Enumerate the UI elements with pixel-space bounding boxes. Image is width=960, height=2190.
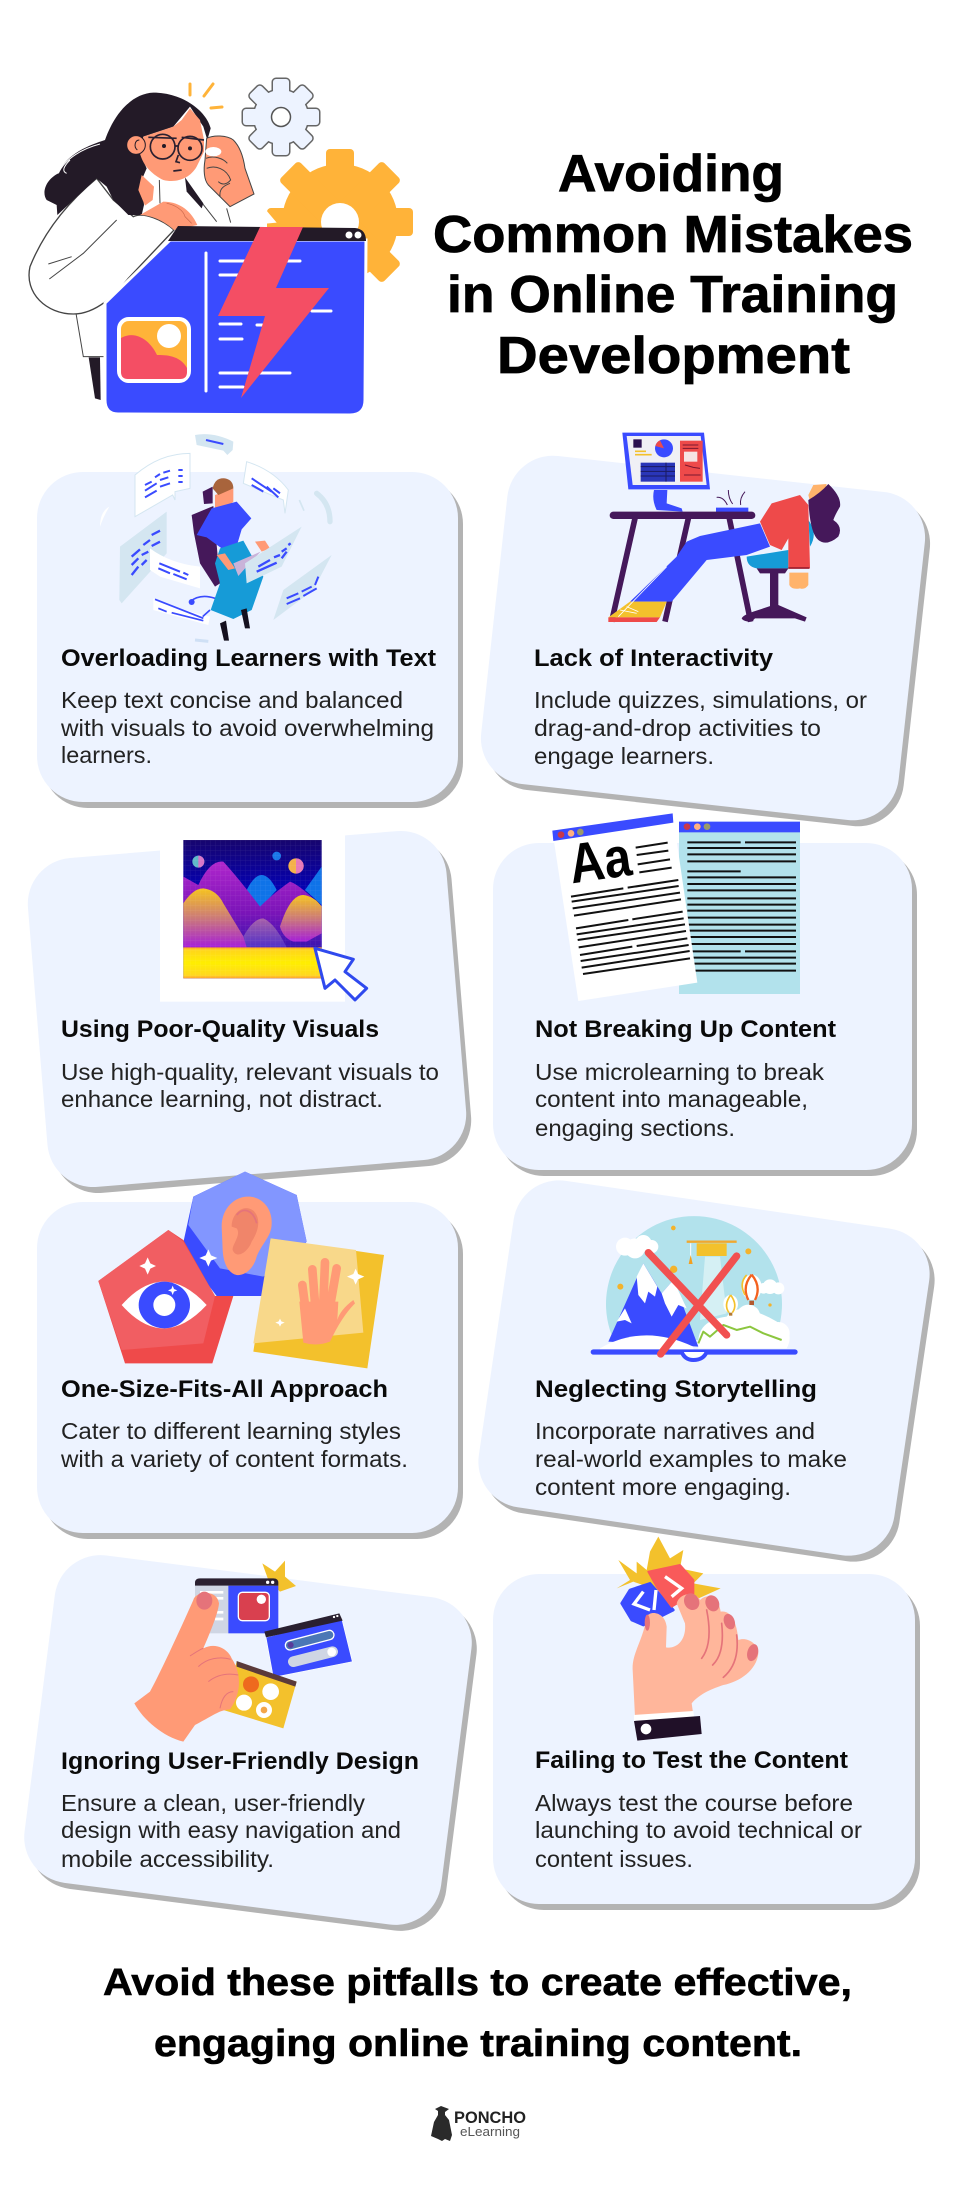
body text (535, 1418, 847, 1500)
icon: hand pinching code tags (617, 1537, 760, 1741)
card background (19, 1550, 482, 1936)
icon: lightning bolt (218, 227, 329, 398)
body text (61, 1059, 439, 1112)
card background (37, 1202, 463, 1539)
heading: Neglecting Storytelling (535, 1376, 817, 1403)
header illustration: woman, gears and window (29, 79, 413, 415)
panel: not breaking up content (493, 813, 917, 1176)
body text: content issues. (535, 1846, 693, 1872)
card background (493, 1574, 920, 1910)
body text: Use microlearning to break (535, 1059, 825, 1085)
body text: design with easy navigation and (61, 1817, 401, 1843)
body text: engage learners. (534, 743, 714, 769)
card background (493, 843, 917, 1176)
panel: ignoring user-friendly design (19, 1550, 482, 1936)
body text: Use high-quality, relevant visuals to (61, 1059, 439, 1085)
icon: dense text documents (552, 813, 800, 1001)
body text (60, 1418, 408, 1472)
title (433, 145, 913, 385)
panel: using poor-quality visuals (24, 820, 475, 1197)
icon: bored worker at desk (608, 433, 840, 622)
body text (534, 687, 867, 769)
title: Avoiding (558, 145, 784, 203)
panel: lack of interactivity (476, 433, 935, 831)
body text: engaging sections. (535, 1115, 735, 1141)
body text: content more engaging. (535, 1474, 791, 1500)
title: in Online Training (447, 266, 898, 324)
icon: storybook crossed out (593, 1216, 795, 1360)
body text (61, 1790, 401, 1872)
icon: person surrounded by text panels (100, 434, 332, 641)
body text: Include quizzes, simulations, or (534, 687, 867, 713)
body text (535, 1790, 862, 1872)
icon: pixelated picture with cursor (160, 820, 367, 1002)
body text: learners. (61, 742, 152, 768)
heading: Failing to Test the Content (535, 1747, 848, 1774)
logo: Poncho eLearning: eLearning (460, 2124, 520, 2139)
body text (535, 1059, 825, 1141)
panel: one-size-fits-all approach (37, 1172, 463, 1539)
body text: with a variety of content formats. (60, 1446, 408, 1472)
body text: Cater to different learning styles (61, 1418, 401, 1444)
heading: Not Breaking Up Content (535, 1016, 836, 1043)
body text (60, 687, 434, 768)
body text: Keep text concise and balanced (61, 687, 403, 713)
body text: mobile accessibility. (61, 1846, 274, 1872)
body text: Always test the course before (535, 1790, 853, 1816)
card background (24, 827, 475, 1197)
card background (37, 472, 463, 808)
body text: drag-and-drop activities to (534, 715, 821, 741)
closing message: Avoid these pitfalls to create effective, (103, 1962, 852, 2004)
body text: Ensure a clean, user-friendly (61, 1790, 366, 1816)
icon: eye, ear and hand senses (98, 1172, 384, 1368)
body text: content into manageable, (535, 1086, 808, 1112)
heading: One-Size-Fits-All Approach (61, 1376, 388, 1403)
closing message: engaging online training content. (154, 2023, 802, 2065)
icon: idea sparks (190, 84, 222, 108)
icon: orange gear (267, 149, 413, 295)
heading: Ignoring User-Friendly Design (61, 1748, 419, 1775)
body text: launching to avoid technical or (535, 1817, 862, 1843)
body text: with visuals to avoid overwhelming (60, 715, 434, 741)
woman figure (29, 93, 277, 400)
logo: Poncho eLearning: PONCHO (454, 2108, 526, 2127)
body text: real-world examples to make (535, 1446, 847, 1472)
icon: browser window (105, 226, 366, 415)
heading: Overloading Learners with Text (61, 645, 436, 672)
icon: dense text documents: Aa (565, 824, 636, 895)
panel: neglecting storytelling (472, 1174, 941, 1568)
body text: Incorporate narratives and (535, 1418, 815, 1444)
title: Common Mistakes (433, 206, 913, 264)
panel: overloading learners with text (37, 434, 463, 808)
heading: Lack of Interactivity (534, 645, 774, 672)
body text: enhance learning, not distract. (61, 1086, 383, 1112)
closing message (103, 1962, 852, 2065)
icon: finger tapping app windows (134, 1561, 352, 1742)
heading: Using Poor-Quality Visuals (61, 1016, 379, 1043)
panel: failing to test the content (493, 1537, 920, 1910)
card background (476, 451, 935, 831)
icon: grey gear (243, 79, 319, 155)
title: Development (497, 327, 850, 385)
card background (472, 1174, 941, 1568)
logo: Poncho eLearning (431, 2106, 526, 2141)
